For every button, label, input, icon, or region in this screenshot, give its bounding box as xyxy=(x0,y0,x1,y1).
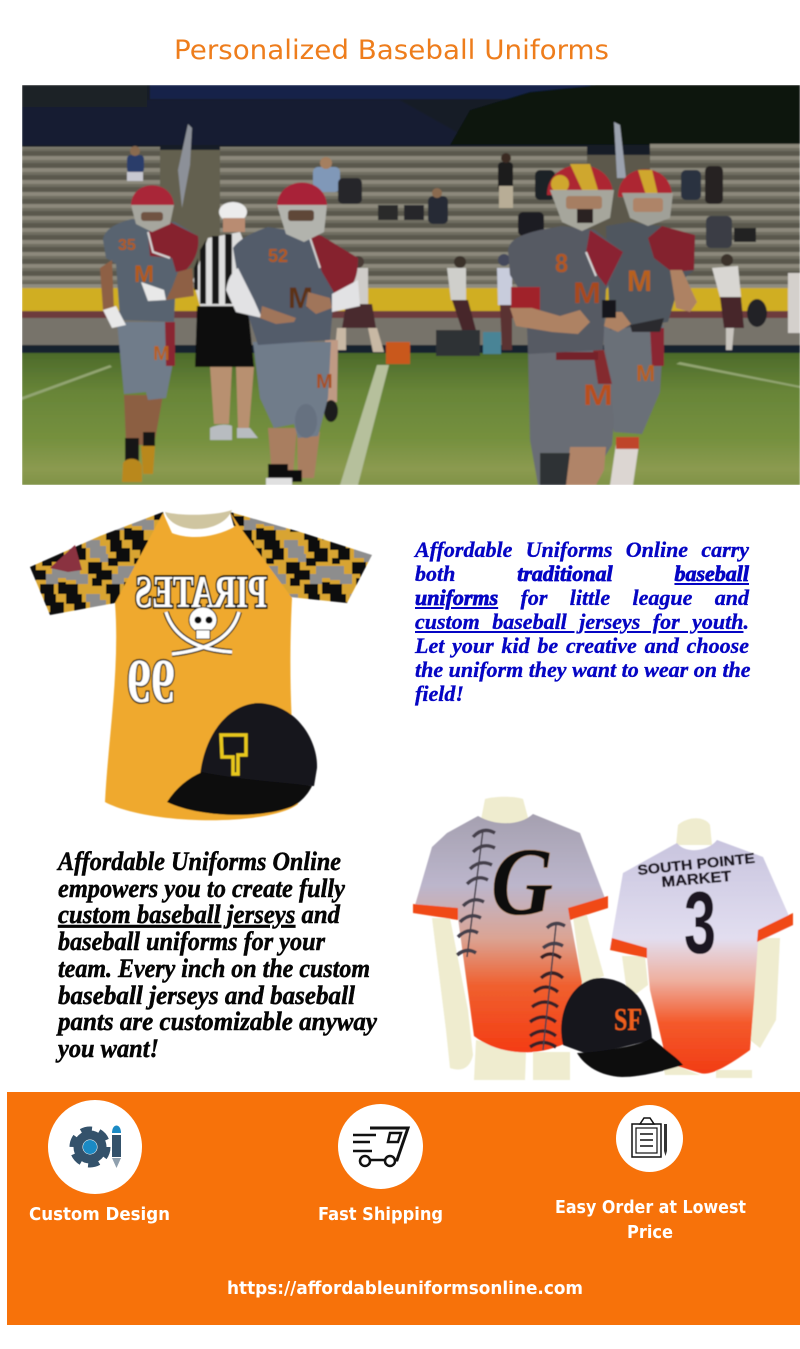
player 52 xyxy=(226,182,360,485)
label: custom design: Custom Design xyxy=(29,1204,170,1225)
referee xyxy=(193,202,258,440)
icon: custom design gear and pencil xyxy=(48,1100,142,1194)
back jersey: MARKET xyxy=(661,868,732,891)
blue paragraph: both traditional baseball xyxy=(415,561,749,586)
front mannequin xyxy=(432,797,604,1080)
jersey sleeves xyxy=(30,512,372,615)
black paragraph: custom baseball jerseys and xyxy=(58,900,341,929)
stitches xyxy=(457,830,565,1050)
blue paragraph: custom baseball jerseys for youth. xyxy=(415,609,749,634)
black paragraph: empowers you to create fully xyxy=(58,874,345,903)
jersey body xyxy=(105,512,298,820)
player 52: M xyxy=(288,282,313,315)
front jersey xyxy=(413,814,608,1052)
back mannequin xyxy=(622,818,780,1078)
black paragraph: team. Every inch on the custom xyxy=(58,954,370,983)
back jersey: 3 xyxy=(684,873,716,972)
icon: clipboard order form xyxy=(616,1105,683,1172)
orange footer panel xyxy=(7,1092,800,1325)
player 8: 8 xyxy=(555,248,568,278)
player 35: 35 xyxy=(118,237,136,254)
blue paragraph xyxy=(414,537,751,706)
player 5: M xyxy=(636,360,655,386)
red and lavender jerseys on mannequins xyxy=(413,797,793,1080)
yellow Pirates jersey xyxy=(30,510,372,820)
black Pirates cap xyxy=(167,703,317,815)
player 5: M xyxy=(627,265,652,298)
black paragraph: you want! xyxy=(55,1034,159,1063)
player 52: 52 xyxy=(268,246,288,266)
far player leg xyxy=(324,340,338,422)
jersey lettering: 99 xyxy=(127,648,175,716)
black paragraph: Affordable Uniforms Online xyxy=(56,847,341,876)
label: easy order: Easy Order at Lowest xyxy=(555,1197,746,1218)
back jersey: SOUTH POINTE xyxy=(637,850,756,878)
blue paragraph: uniforms for little league and xyxy=(415,585,749,610)
black SF cap xyxy=(561,978,683,1077)
background players xyxy=(335,254,800,356)
blue paragraph: Let your kid be creative and choose xyxy=(415,633,749,658)
back jersey xyxy=(610,840,793,1074)
player 35: M xyxy=(134,261,154,288)
label: easy order: Price xyxy=(627,1222,673,1243)
player 35 xyxy=(100,185,198,482)
website url: https://affordableuniformsonline.com xyxy=(227,1278,583,1299)
black paragraph xyxy=(55,847,377,1063)
skull and swords xyxy=(166,607,239,654)
hero photo: football players on field xyxy=(22,85,800,485)
player 8: M xyxy=(583,379,613,412)
label: easy order xyxy=(555,1197,746,1243)
front jersey: G xyxy=(491,828,553,935)
blue paragraph: field! xyxy=(415,681,464,706)
icon: fast shipping cart xyxy=(338,1104,423,1189)
blue paragraph: Affordable Uniforms Online carry xyxy=(415,537,749,562)
black paragraph: baseball jerseys and baseball xyxy=(58,981,356,1010)
jersey lettering xyxy=(127,566,267,716)
label: fast shipping: Fast Shipping xyxy=(318,1204,443,1225)
spectators in the stands xyxy=(127,146,756,248)
title: Personalized Baseball Uniforms xyxy=(174,35,609,66)
player 8 xyxy=(508,164,631,485)
player 52: M xyxy=(316,371,333,393)
black SF cap: SF xyxy=(614,1001,642,1037)
blue paragraph: the uniform they want to wear on the xyxy=(415,657,751,682)
jersey lettering: PIRATES xyxy=(135,566,267,617)
player 35: M xyxy=(153,343,170,365)
player 5 xyxy=(603,169,697,485)
black paragraph: baseball uniforms for your xyxy=(58,927,326,956)
player 8: M xyxy=(573,277,601,310)
black paragraph: pants are customizable anyway xyxy=(56,1007,377,1036)
